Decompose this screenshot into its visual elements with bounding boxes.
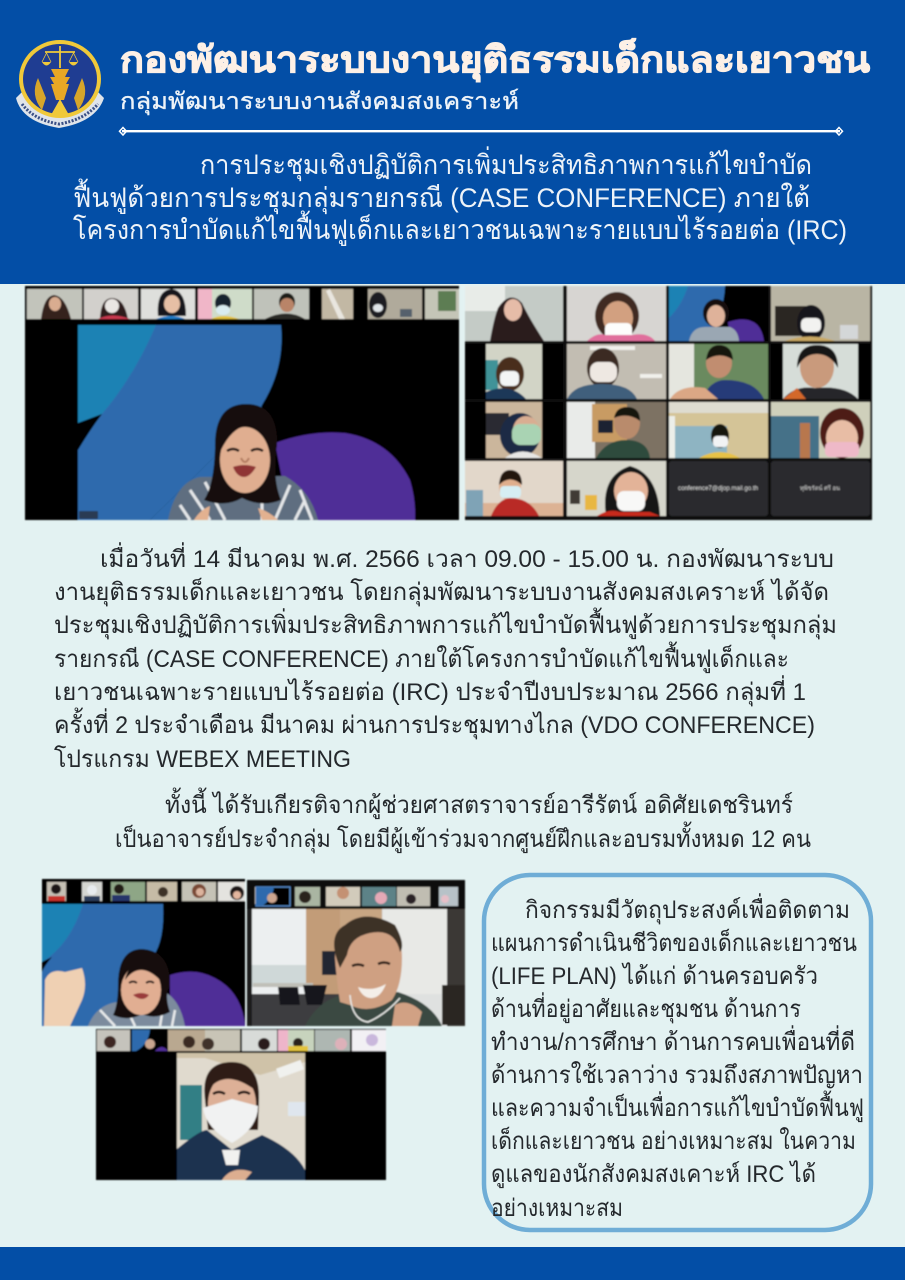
activity objectives text: ดูแลของนักสังคมสงเคาะห์ IRC ได้ — [491, 1160, 816, 1189]
photo: gallery of participants: conference7@djop.mail.go.th — [678, 486, 758, 492]
photo: main speaker video call — [25, 286, 459, 520]
photo: gallery of participants: ทุพิชรัตน์ ศรี อน — [800, 484, 840, 492]
photo: masked participant — [96, 1029, 386, 1180]
activity objectives text: และความจำเป็นเพื่อการแก้ไขบำบัดฟื้นฟู — [491, 1090, 864, 1123]
workshop title — [73, 146, 847, 246]
panel: activity objectives — [484, 875, 871, 1230]
subtitle: division name: กลุ่มพัฒนาระบบงานสังคมสงเคราะห์ — [120, 88, 519, 115]
activity objectives text: อย่างเหมาะสม — [491, 1195, 623, 1222]
body paragraph: event details: รายกรณี (CASE CONFERENCE) ภายใต้โครงการบำบัดแก้ไขฟื้นฟูเด็กและ — [54, 641, 789, 674]
body paragraph: speaker and participants — [115, 787, 811, 854]
activity objectives text: เด็กและเยาวชน อย่างเหมาะสม ในความ — [491, 1126, 856, 1155]
body paragraph: speaker and participants: ทั้งนี้ ได้รับเกียรติจากผู้ช่วยศาสตราจารย์อารีรัตน์ อดิศัยเดชรินทร์ — [165, 787, 793, 820]
header band — [0, 0, 905, 284]
logo emblem — [16, 40, 104, 128]
body paragraph: event details: เยาวชนเฉพาะรายแบบไร้รอยต่อ (IRC) ประจำปีงบประมาณ 2566 กลุ่มที่ 1 — [54, 675, 806, 707]
body paragraph: event details: ประชุมเชิงปฏิบัติการเพิ่มประสิทธิภาพการแก้ไขบำบัดฟื้นฟูด้วยการประชุมกลุ่ม — [54, 607, 837, 640]
workshop title: การประชุมเชิงปฏิบัติการเพิ่มประสิทธิภาพการแก้ไขบำบัด — [200, 146, 812, 182]
workshop title: ฟื้นฟูด้วยการประชุมกลุ่มรายกรณี (CASE CONFERENCE) ภายใต้ — [73, 178, 810, 215]
activity objectives text: (LIFE PLAN) ได้แก่ ด้านครอบครัว — [491, 962, 818, 990]
workshop title: โครงการบำบัดแก้ไขฟื้นฟูเด็กและเยาวชนเฉพาะรายแบบไร้รอยต่อ (IRC) — [73, 210, 847, 246]
body paragraph: event details: โปรแกรม WEBEX MEETING — [54, 745, 351, 773]
activity objectives text: ด้านการใช้เวลาว่าง รวมถึงสภาพปัญหา — [491, 1061, 863, 1089]
photo: gallery of participants — [465, 286, 872, 520]
title: department name: กองพัฒนาระบบงานยุติธรรมเด็กและเยาวชน — [120, 37, 870, 83]
body paragraph: speaker and participants: เป็นอาจารย์ประจำกลุ่ม โดยมีผู้เข้าร่วมจากศูนย์ฝึกและอบรมทั้งหมด 12 คน — [115, 821, 811, 854]
activity objectives text: แผนการดำเนินชีวิตของเด็กและเยาวชน — [491, 928, 857, 957]
activity objectives text — [491, 893, 864, 1222]
body paragraph: event details: ครั้งที่ 2 ประจำเดือน มีนาคม ผ่านการประชุมทางไกล (VDO CONFERENCE) — [54, 707, 815, 740]
activity objectives text: ด้านที่อยู่อาศัยและชุมชน ด้านการ — [491, 992, 801, 1024]
body paragraph: event details: งานยุติธรรมเด็กและเยาวชน โดยกลุ่มพัฒนาระบบงานสังคมสงเคราะห์ ได้จัด — [54, 577, 829, 607]
activity objectives text: กิจกรรมมีวัตถุประสงค์เพื่อติดตาม — [525, 893, 850, 925]
photo: speaker gesturing — [42, 879, 245, 1026]
header divider with diamonds — [120, 128, 842, 135]
photo: smiling participant in office — [247, 880, 465, 1026]
body paragraph: event details — [54, 542, 837, 773]
activity objectives text: ทำงาน/การศึกษา ด้านการคบเพื่อนที่ดี — [491, 1025, 855, 1056]
body paragraph: event details: เมื่อวันที่ 14 มีนาคม พ.ศ. 2566 เวลา 09.00 - 15.00 น. กองพัฒนาระบบ — [100, 542, 834, 573]
footer band — [0, 1247, 905, 1280]
